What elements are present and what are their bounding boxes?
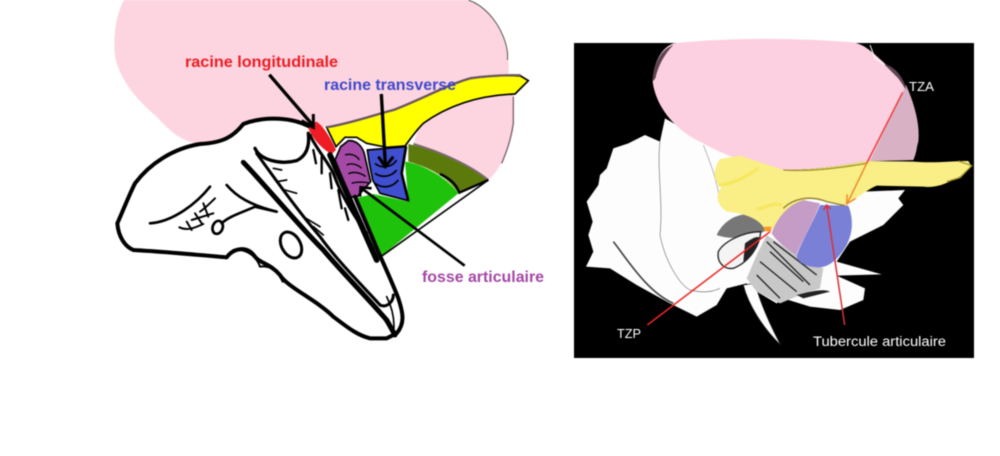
arrow to tubercule articulaire [823,205,845,325]
blue articular tubercle [797,205,852,267]
arrow to TZP [647,232,770,325]
label: Tubercule articulaire: Tubercule articulaire [813,334,946,349]
bone outline [117,119,402,338]
label: racine longitudinale: racine longitudinale [185,54,338,71]
panel: schematic line drawing of the temporal bone [114,0,528,338]
shaded tympanic region [717,214,830,303]
articular tubercle in blue [367,147,408,201]
yellow zygomatic process [715,156,972,230]
white temporal bone [586,118,905,317]
longitudinal root in red [308,122,336,154]
arrow to articular fossa [360,187,465,266]
orange marker at posterior zygomatic root [764,227,771,231]
pink squamous region [653,39,919,170]
zygomatic process in yellow (transverse root) [327,76,528,147]
arrow to TZA [847,92,903,204]
articular fossa in purple [335,141,371,197]
label: fosse articulaire: fosse articulaire [422,269,544,286]
black background [574,43,974,358]
tympanic bone dark olive [408,144,488,193]
arrow to longitudinal root [269,75,313,127]
tympanic area green [355,162,458,257]
label: TZA: TZA [909,79,934,94]
squamous part in pink [114,0,513,180]
styloid process [743,283,781,345]
label: racine transverse: racine transverse [324,77,456,94]
label: TZP: TZP [617,326,641,341]
arrow to transverse root [378,94,393,167]
panel: annotated photograph on black background [574,39,974,358]
purple articular fossa [772,200,820,255]
